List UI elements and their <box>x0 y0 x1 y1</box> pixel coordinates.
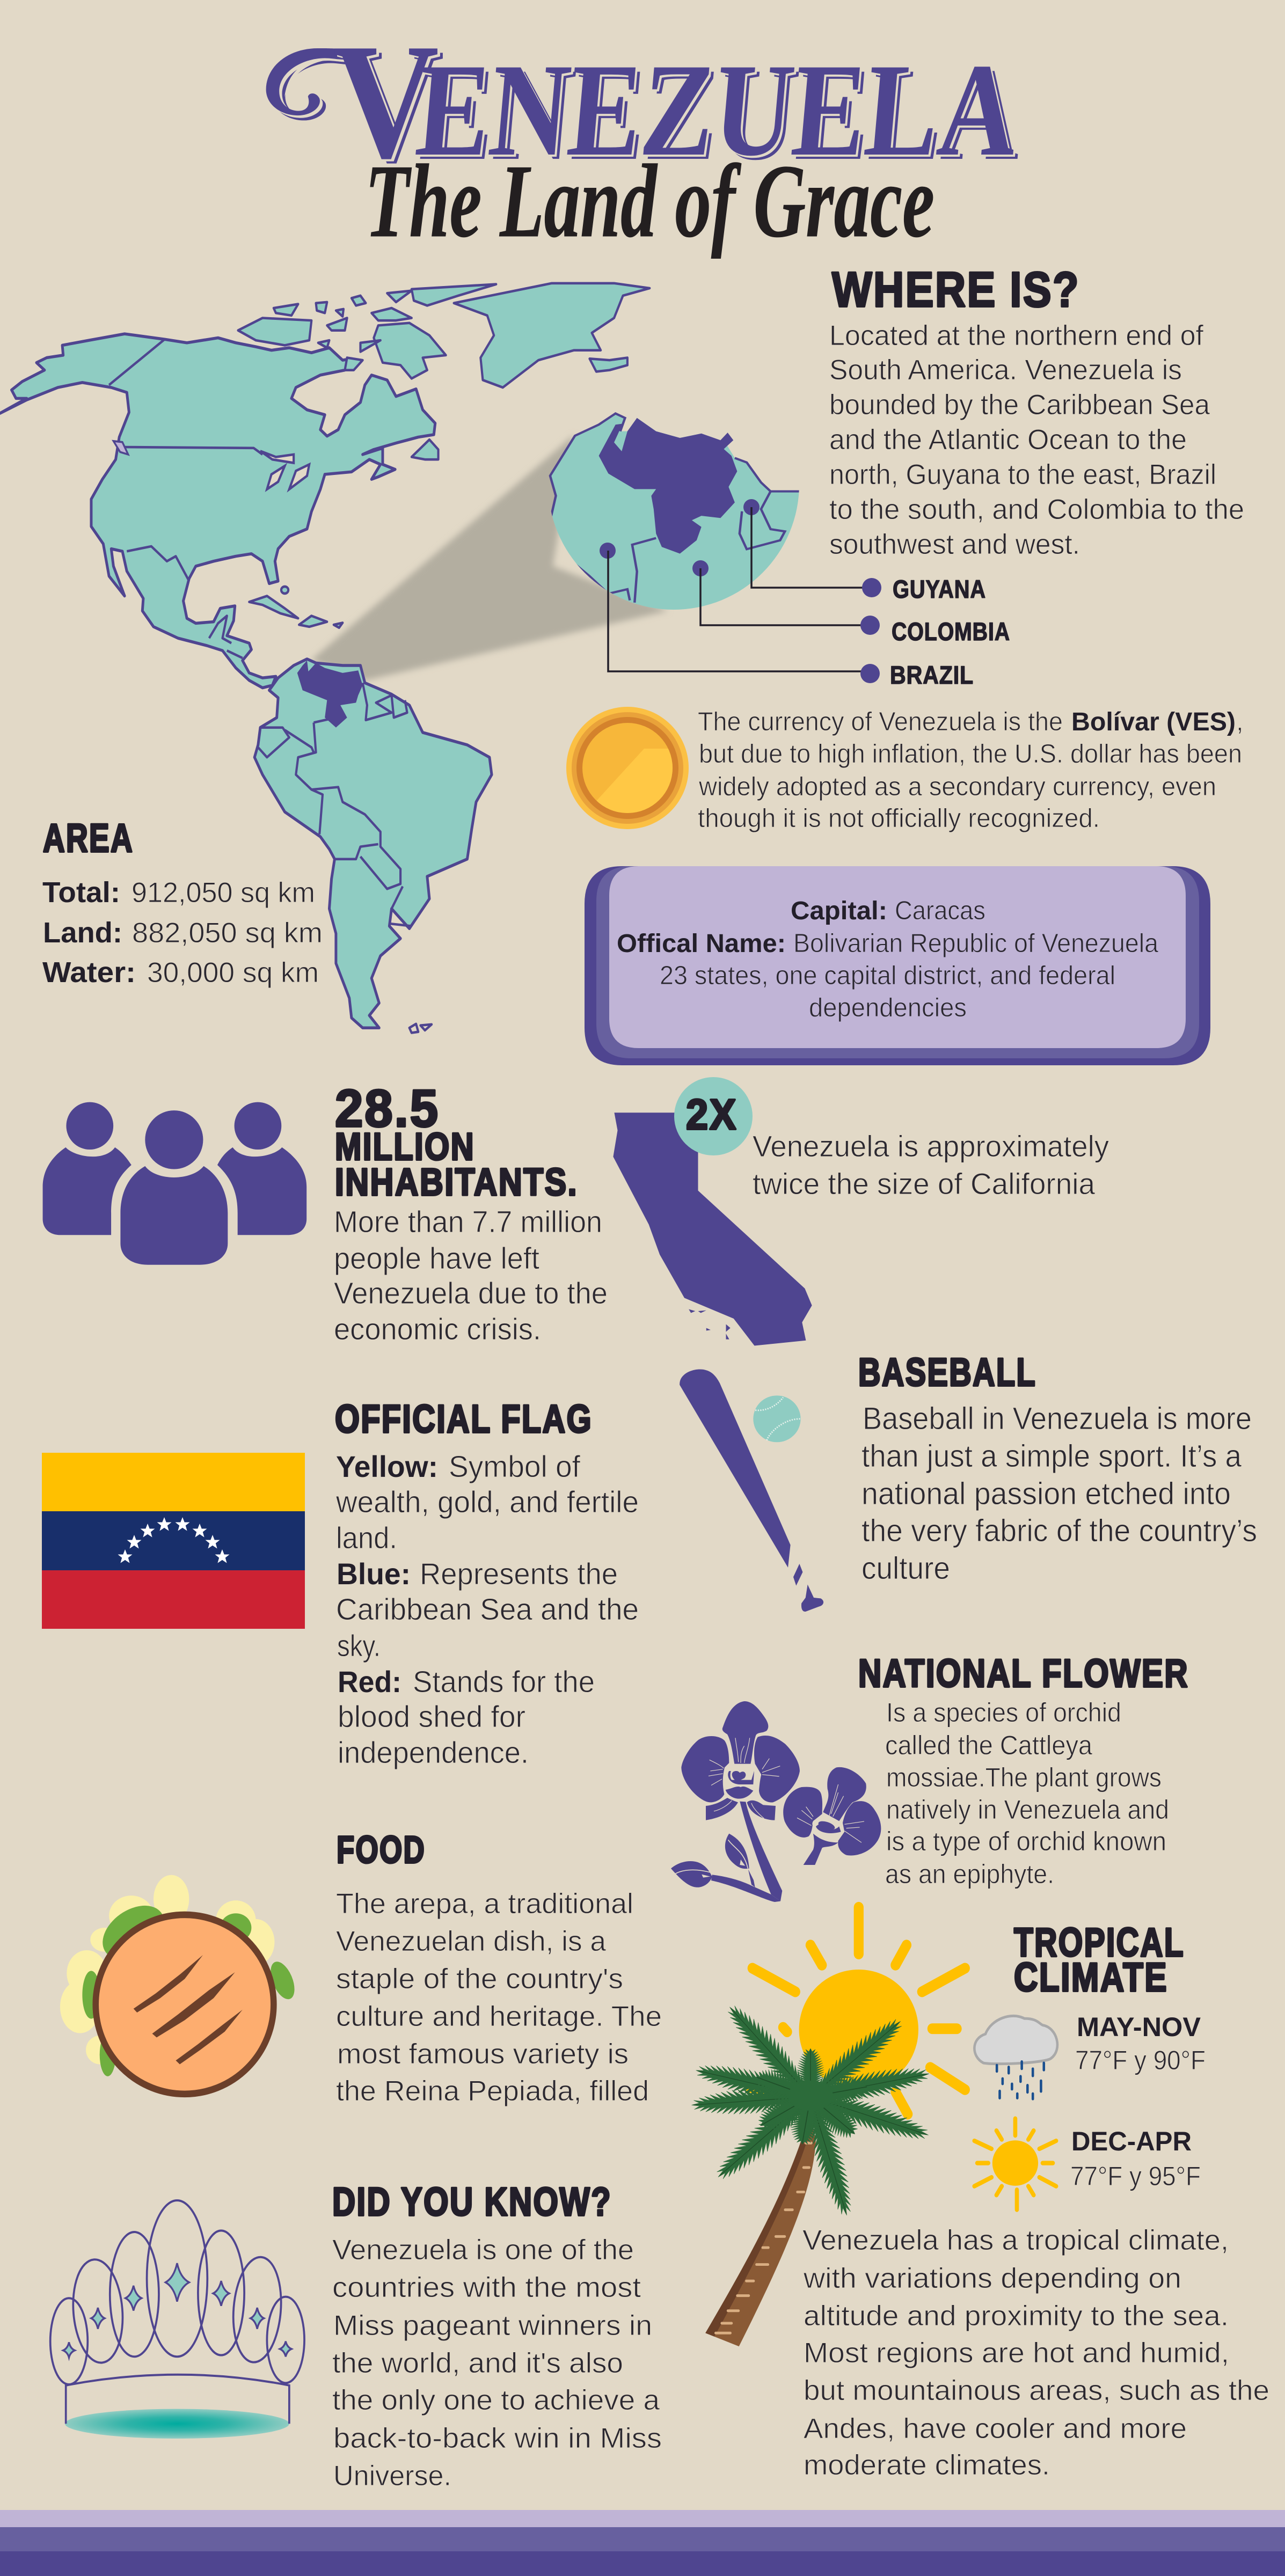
text: did you know body: Universe. <box>333 2460 451 2492</box>
text: food body <box>336 1888 662 2107</box>
text: did you know body: back-to-back win in Miss <box>333 2423 662 2454</box>
text: did you know body: countries with the most <box>332 2272 641 2303</box>
filling <box>60 1875 274 2064</box>
text: climate body: Venezuela has a tropical climate, <box>802 2224 1229 2256</box>
text: national flower body: is a type of orchid known <box>886 1826 1166 1856</box>
callout: colombia: COLOMBIA <box>892 617 1010 646</box>
text: national flower body: natively in Venezuela and <box>886 1795 1169 1825</box>
text: area figures: Water: <box>42 956 136 989</box>
text: did you know body: the only one to achieve a <box>332 2384 660 2416</box>
text: food body: most famous variety is <box>337 2038 629 2070</box>
title: ENEZUELA <box>411 36 1024 184</box>
text: flag meaning: wealth, gold, and fertile <box>335 1485 639 1519</box>
text: did you know body: Miss pageant winners in <box>333 2310 652 2341</box>
flower two <box>783 1767 881 1865</box>
arctic islands <box>238 283 649 628</box>
heading: food: FOOD <box>337 1829 426 1871</box>
text: climate body <box>802 2224 1269 2481</box>
title: ENEZUELA <box>415 40 1028 188</box>
icon: sun <box>750 1907 965 2114</box>
heading: area: AREA <box>43 816 134 860</box>
text: currency: though it is not officially recognized. <box>698 804 1100 833</box>
heading: population <box>335 1079 578 1204</box>
text: capital: Bolivarian Republic of Venezuela <box>793 929 1159 958</box>
heading: tropical climate <box>1014 1920 1185 2000</box>
text: capital: Caracas <box>895 896 985 925</box>
callout: brazil: BRAZIL <box>890 661 974 689</box>
title: V <box>338 14 444 197</box>
text: dec-apr <box>1070 2126 1201 2191</box>
text: climate body: moderate climates. <box>804 2449 1050 2481</box>
text: currency: Bolívar (VES) <box>1071 708 1236 736</box>
text: population body: More than 7.7 million <box>334 1205 602 1239</box>
text: flag meaning: Stands for the <box>413 1665 595 1699</box>
inset coast line <box>549 413 625 527</box>
stem and buds <box>671 1802 782 1902</box>
text: flag meaning: blood shed for <box>338 1700 525 1734</box>
text: climate body: altitude and proximity to the sea. <box>804 2300 1229 2332</box>
borders south america <box>258 683 412 926</box>
zoom cone shadow <box>311 435 668 680</box>
text: climate body: but mountainous areas, such as the <box>804 2375 1269 2406</box>
text: area figures: Land: <box>43 917 122 949</box>
text: flag meaning: Caribbean Sea and the <box>336 1592 639 1627</box>
borders north america <box>109 339 262 658</box>
south america <box>254 659 492 1028</box>
text: national flower body <box>885 1697 1169 1889</box>
inset map: zoom on venezuela <box>549 412 799 610</box>
text: baseball body: than just a simple sport. It’s a <box>861 1439 1242 1474</box>
text: where is body: north, Guyana to the east, Brazil <box>829 459 1216 491</box>
callout: brazil <box>600 543 974 689</box>
icon: crown <box>50 2200 304 2439</box>
text: did you know body: the world, and it's also <box>332 2347 623 2379</box>
icon: small sun <box>974 2119 1056 2210</box>
text: baseball body <box>861 1401 1257 1586</box>
text: flag meaning: Blue: <box>337 1557 411 1591</box>
icon: palm tree <box>691 1999 932 2346</box>
icon: rain cloud <box>974 2016 1057 2099</box>
title: ENEZUELA <box>413 38 1026 186</box>
icon: baseball bat and ball <box>680 1369 823 1612</box>
falkland islands <box>410 1024 432 1033</box>
text: currency: , <box>1236 707 1244 736</box>
icon: orchid <box>671 1701 881 1902</box>
text: capital: Offical Name: <box>617 930 786 958</box>
callout: colombia <box>692 560 1010 646</box>
text: baseball body: Baseball in Venezuela is more <box>863 1401 1252 1436</box>
text: capital <box>617 896 1159 1022</box>
text: population body: Venezuela due to the <box>334 1276 608 1311</box>
text: did you know body: Venezuela is one of the <box>332 2234 634 2266</box>
callout: guyana <box>743 499 986 603</box>
text: food body: culture and heritage. The <box>336 2001 662 2032</box>
text: where is body <box>829 320 1244 560</box>
text: baseball body: national passion etched into <box>861 1476 1231 1511</box>
text: dec-apr: DEC-APR <box>1071 2126 1192 2156</box>
title <box>266 10 1028 197</box>
text: may-nov: 77°F y 90°F <box>1075 2045 1206 2075</box>
icon: coin <box>566 707 689 829</box>
text: baseball body: culture <box>861 1551 950 1586</box>
inset land <box>551 415 799 610</box>
text: may-nov <box>1075 2012 1206 2075</box>
text: baseball body: the very fabric of the country’s <box>861 1513 1257 1548</box>
grill marks <box>134 1955 243 2064</box>
text: may-nov: MAY-NOV <box>1077 2012 1201 2042</box>
title: V <box>335 12 442 195</box>
callouts: neighbours <box>600 499 1010 689</box>
footer bands <box>0 2510 1285 2576</box>
text: flag meaning: sky. <box>337 1629 381 1663</box>
text: currency <box>698 707 1244 833</box>
text: flag meaning: Red: <box>338 1665 401 1699</box>
text: food body: staple of the country's <box>336 1963 623 1995</box>
text: food body: the Reina Pepiada, filled <box>336 2075 649 2107</box>
text: where is body: to the south, and Colombia to the <box>829 494 1244 525</box>
text: where is body: southwest and west. <box>829 529 1080 560</box>
icon: arepa <box>60 1875 300 2094</box>
icon: flag <box>42 1453 305 1629</box>
heading: national flower: NATIONAL FLOWER <box>858 1652 1189 1695</box>
text: flag meaning: Yellow: <box>336 1450 438 1483</box>
text: population body: people have left <box>334 1241 539 1276</box>
icon: california <box>613 1113 812 1346</box>
text: area figures: 912,050 sq km <box>132 877 315 909</box>
heading: population: MILLION <box>335 1126 475 1168</box>
text: national flower body: called the Cattleya <box>885 1730 1092 1760</box>
heading: official flag: OFFICIAL FLAG <box>335 1397 593 1441</box>
text: flag meaning: Represents the <box>420 1557 618 1591</box>
fronds <box>691 1999 932 2219</box>
heading: baseball: BASEBALL <box>858 1351 1036 1394</box>
text: climate body: with variations depending on <box>803 2263 1181 2294</box>
text: national flower body: as an epiphyte. <box>885 1859 1054 1889</box>
badge: 2x <box>674 1077 753 1155</box>
heading: tropical climate: TROPICAL <box>1014 1920 1185 1965</box>
text: flag meaning: independence. <box>338 1736 529 1770</box>
arepa bread <box>96 1915 274 2094</box>
badge: 2x: 2X <box>686 1091 738 1138</box>
text: california comparison <box>753 1129 1109 1201</box>
title: V <box>333 10 439 193</box>
text: climate body: Most regions are hot and humid, <box>804 2337 1229 2369</box>
text: flag meaning: land. <box>336 1521 397 1555</box>
icon: people <box>43 1102 306 1265</box>
world map: the Americas <box>0 283 649 1033</box>
trunk <box>705 2105 816 2346</box>
title flourish on V <box>266 48 360 120</box>
vancouver island <box>113 441 128 455</box>
text: food body: Venezuelan dish, is a <box>336 1926 607 1957</box>
text: where is body: bounded by the Caribbean Sea <box>829 389 1210 421</box>
text: national flower body: Is a species of orchid <box>886 1697 1121 1728</box>
flower one <box>681 1701 800 1820</box>
text: dec-apr: 77°F y 95°F <box>1070 2161 1201 2191</box>
text: food body: The arepa, a traditional <box>336 1888 633 1920</box>
text: capital: dependencies <box>809 993 967 1022</box>
callout: guyana: GUYANA <box>893 575 986 603</box>
panel: capital box <box>585 866 1210 1065</box>
heading: did you know: DID YOU KNOW? <box>332 2179 612 2224</box>
text: national flower body: mossiae.The plant grows <box>886 1762 1162 1792</box>
text: currency: but due to high inflation, the U.S. dollar has been <box>699 740 1242 769</box>
inset venezuela <box>599 418 737 554</box>
text: where is body: South America. Venezuela is <box>829 354 1182 386</box>
text: area figures: 30,000 sq km <box>147 957 319 989</box>
text: california comparison: twice the size of California <box>753 1167 1096 1201</box>
venezuela highlighted <box>297 661 363 728</box>
heading: population: 28.5 <box>335 1079 440 1138</box>
inset borders <box>568 458 799 603</box>
north america <box>0 334 435 688</box>
text: where is body: Located at the northern end of <box>829 320 1203 352</box>
text: area figures: 882,050 sq km <box>132 917 323 949</box>
text: climate body: Andes, have cooler and more <box>804 2413 1187 2445</box>
text: where is body: and the Atlantic Ocean to the <box>829 424 1187 456</box>
text: population body <box>334 1205 608 1346</box>
text: population body: economic crisis. <box>334 1312 541 1346</box>
text: currency: widely adopted as a secondary currency, even <box>698 772 1216 801</box>
heading: where is: WHERE IS? <box>832 262 1080 317</box>
subtitle: The Land of Grace <box>365 143 934 259</box>
text: capital: Capital: <box>791 897 887 925</box>
text: did you know body <box>332 2234 662 2492</box>
great lakes <box>260 451 309 489</box>
text: area figures: Total: <box>42 876 120 909</box>
heading: population: INHABITANTS. <box>335 1161 578 1204</box>
text: california comparison: Venezuela is approximately <box>753 1129 1109 1163</box>
heading: tropical climate: CLIMATE <box>1014 1955 1168 2000</box>
text: area figures <box>42 876 323 989</box>
text: capital: 23 states, one capital district, and federal <box>660 961 1115 990</box>
text: currency: The currency of Venezuela is the <box>698 707 1063 736</box>
text: flag meaning <box>335 1450 639 1770</box>
text: flag meaning: Symbol of <box>449 1450 580 1484</box>
